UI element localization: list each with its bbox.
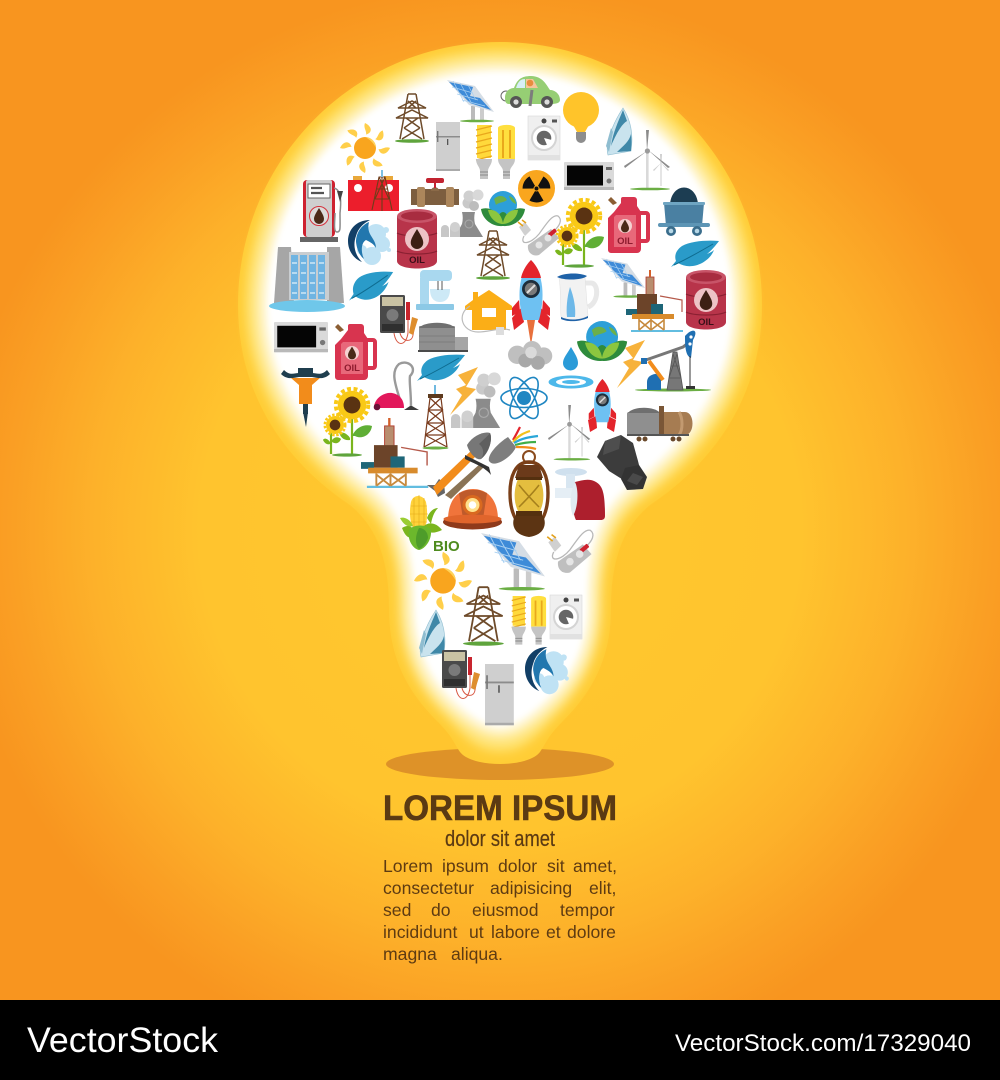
- icon: washing machine: [528, 116, 560, 160]
- icon: corn biofuel: [400, 495, 460, 555]
- icon: offshore oil rig: [361, 418, 428, 487]
- body paragraph: aliqua.: [451, 944, 503, 964]
- icon: coal: [597, 435, 647, 490]
- icon: battery with derrick: [348, 170, 399, 211]
- icon: oil barrel: [686, 270, 726, 330]
- icon: house with plug: [462, 290, 512, 335]
- icon: radiation sign: [518, 169, 555, 207]
- icon: feather: [349, 272, 393, 301]
- body paragraph: incididunt: [383, 922, 457, 942]
- icon: sunflowers: [555, 200, 604, 268]
- icon: fridge: [485, 664, 514, 725]
- body paragraph: [383, 856, 617, 964]
- icon: oil barrel: [397, 209, 437, 268]
- body paragraph: labore: [491, 922, 540, 942]
- watermark image id: VectorStock.com/17329040: [675, 1030, 971, 1057]
- icon: sun: [340, 123, 390, 173]
- icon: energy saving lamps: [476, 125, 515, 179]
- icon: pipe valve: [411, 178, 459, 207]
- icon: jackhammer: [281, 368, 330, 427]
- icon: offshore oil rig: [626, 270, 683, 331]
- icon: oil derrick: [422, 385, 448, 450]
- icon: light bulb: [563, 92, 599, 143]
- icon: oil barrel: OIL: [409, 255, 425, 266]
- icon: lightning bolt: [450, 367, 478, 415]
- icon: meat grinder: [555, 468, 605, 520]
- light bulb shape: [238, 42, 762, 764]
- icon: oil lantern: [510, 451, 548, 537]
- icon: lightning bolt: [617, 340, 645, 388]
- icon: wind turbine: [624, 130, 670, 190]
- icon: earth with leaves: [481, 191, 525, 226]
- icon: wind turbine: [548, 405, 590, 460]
- icon: water wave: [525, 647, 569, 694]
- icon: hydro dam: [269, 247, 345, 312]
- icon: fridge: [436, 122, 460, 171]
- bulb shadow: [386, 748, 614, 780]
- icon: solar panel: [601, 258, 645, 298]
- icon: sun: [414, 552, 472, 610]
- icon: iron: [606, 108, 632, 155]
- body paragraph: adipisicing: [490, 878, 572, 898]
- icon: sunflowers: [323, 389, 372, 457]
- subheading: dolor sit amet: [445, 826, 555, 851]
- icon: fuel pump: [300, 180, 343, 242]
- body paragraph: Lorem: [383, 856, 433, 876]
- icon: iron: [419, 610, 445, 657]
- icon: transmission tower: [463, 587, 504, 646]
- icon: oil tank: [418, 323, 468, 352]
- body paragraph: ipsum: [442, 856, 489, 876]
- icon: oil canister: OIL: [617, 236, 633, 247]
- heading: LOREM IPSUM: [383, 789, 617, 828]
- watermark logo: VectorStock: [27, 1021, 219, 1060]
- icon: transmission tower: [395, 94, 429, 143]
- icon: small rocket: [588, 379, 616, 432]
- icon: oil canister: [335, 324, 377, 380]
- body paragraph: tempor: [560, 900, 615, 920]
- body paragraph: consectetur: [383, 878, 474, 898]
- icon: food mixer: [416, 270, 454, 310]
- icon: vacuum cleaner: [374, 363, 419, 410]
- icon: energy saving lamps: [512, 596, 546, 645]
- icon: earth with leaves: [577, 321, 627, 361]
- body paragraph: et: [546, 922, 561, 942]
- icon: multimeter: [380, 295, 418, 344]
- icon: microwave: [564, 162, 614, 190]
- icon: electric cable: [489, 427, 538, 464]
- body paragraph: dolor: [498, 856, 537, 876]
- icon: solar panel: [447, 80, 494, 122]
- icon: multimeter: [442, 650, 480, 698]
- icon: power strip: [547, 530, 593, 573]
- icon: electric kettle: [557, 273, 597, 321]
- icon: coal wagon: [658, 188, 710, 236]
- icon: atom: [501, 373, 547, 423]
- icon: washing machine: [550, 595, 582, 639]
- icon: microwave: [274, 322, 328, 352]
- icon: solar panel: [481, 533, 545, 591]
- icon: corn biofuel: BIO: [433, 538, 460, 555]
- icon: oil pump jack: [635, 331, 711, 392]
- icon: water ripple: [548, 376, 594, 388]
- icon: feather: [417, 355, 465, 381]
- icon: water wave: [348, 220, 391, 265]
- icon: transmission tower: [476, 231, 510, 280]
- icon: miner helmet: [443, 489, 502, 530]
- body paragraph: do: [431, 900, 451, 920]
- icon: power plant: [451, 372, 501, 428]
- icon: oil canister: OIL: [344, 363, 360, 374]
- body paragraph: sed: [383, 900, 411, 920]
- icon: oil barrel: OIL: [698, 317, 714, 328]
- watermark bar: [0, 1000, 1000, 1080]
- icon: shovel and pickaxe: [427, 432, 491, 499]
- icon: rocket launching: [508, 260, 552, 370]
- icon: power plant: [441, 190, 484, 237]
- icon: power strip: [518, 216, 560, 255]
- body paragraph: ut: [469, 922, 484, 942]
- body paragraph: magna: [383, 944, 437, 964]
- icon: electric car: [501, 76, 560, 108]
- body paragraph: sit: [547, 856, 565, 876]
- icon: feather: [671, 241, 719, 267]
- body paragraph: amet,: [573, 856, 617, 876]
- body paragraph: dolore: [567, 922, 616, 942]
- icon: oil canister: [608, 197, 650, 253]
- body paragraph: elit,: [589, 878, 616, 898]
- body paragraph: eiusmod: [472, 900, 539, 920]
- icon: water drop: [563, 347, 578, 370]
- icon: tanker wagon: [627, 406, 692, 442]
